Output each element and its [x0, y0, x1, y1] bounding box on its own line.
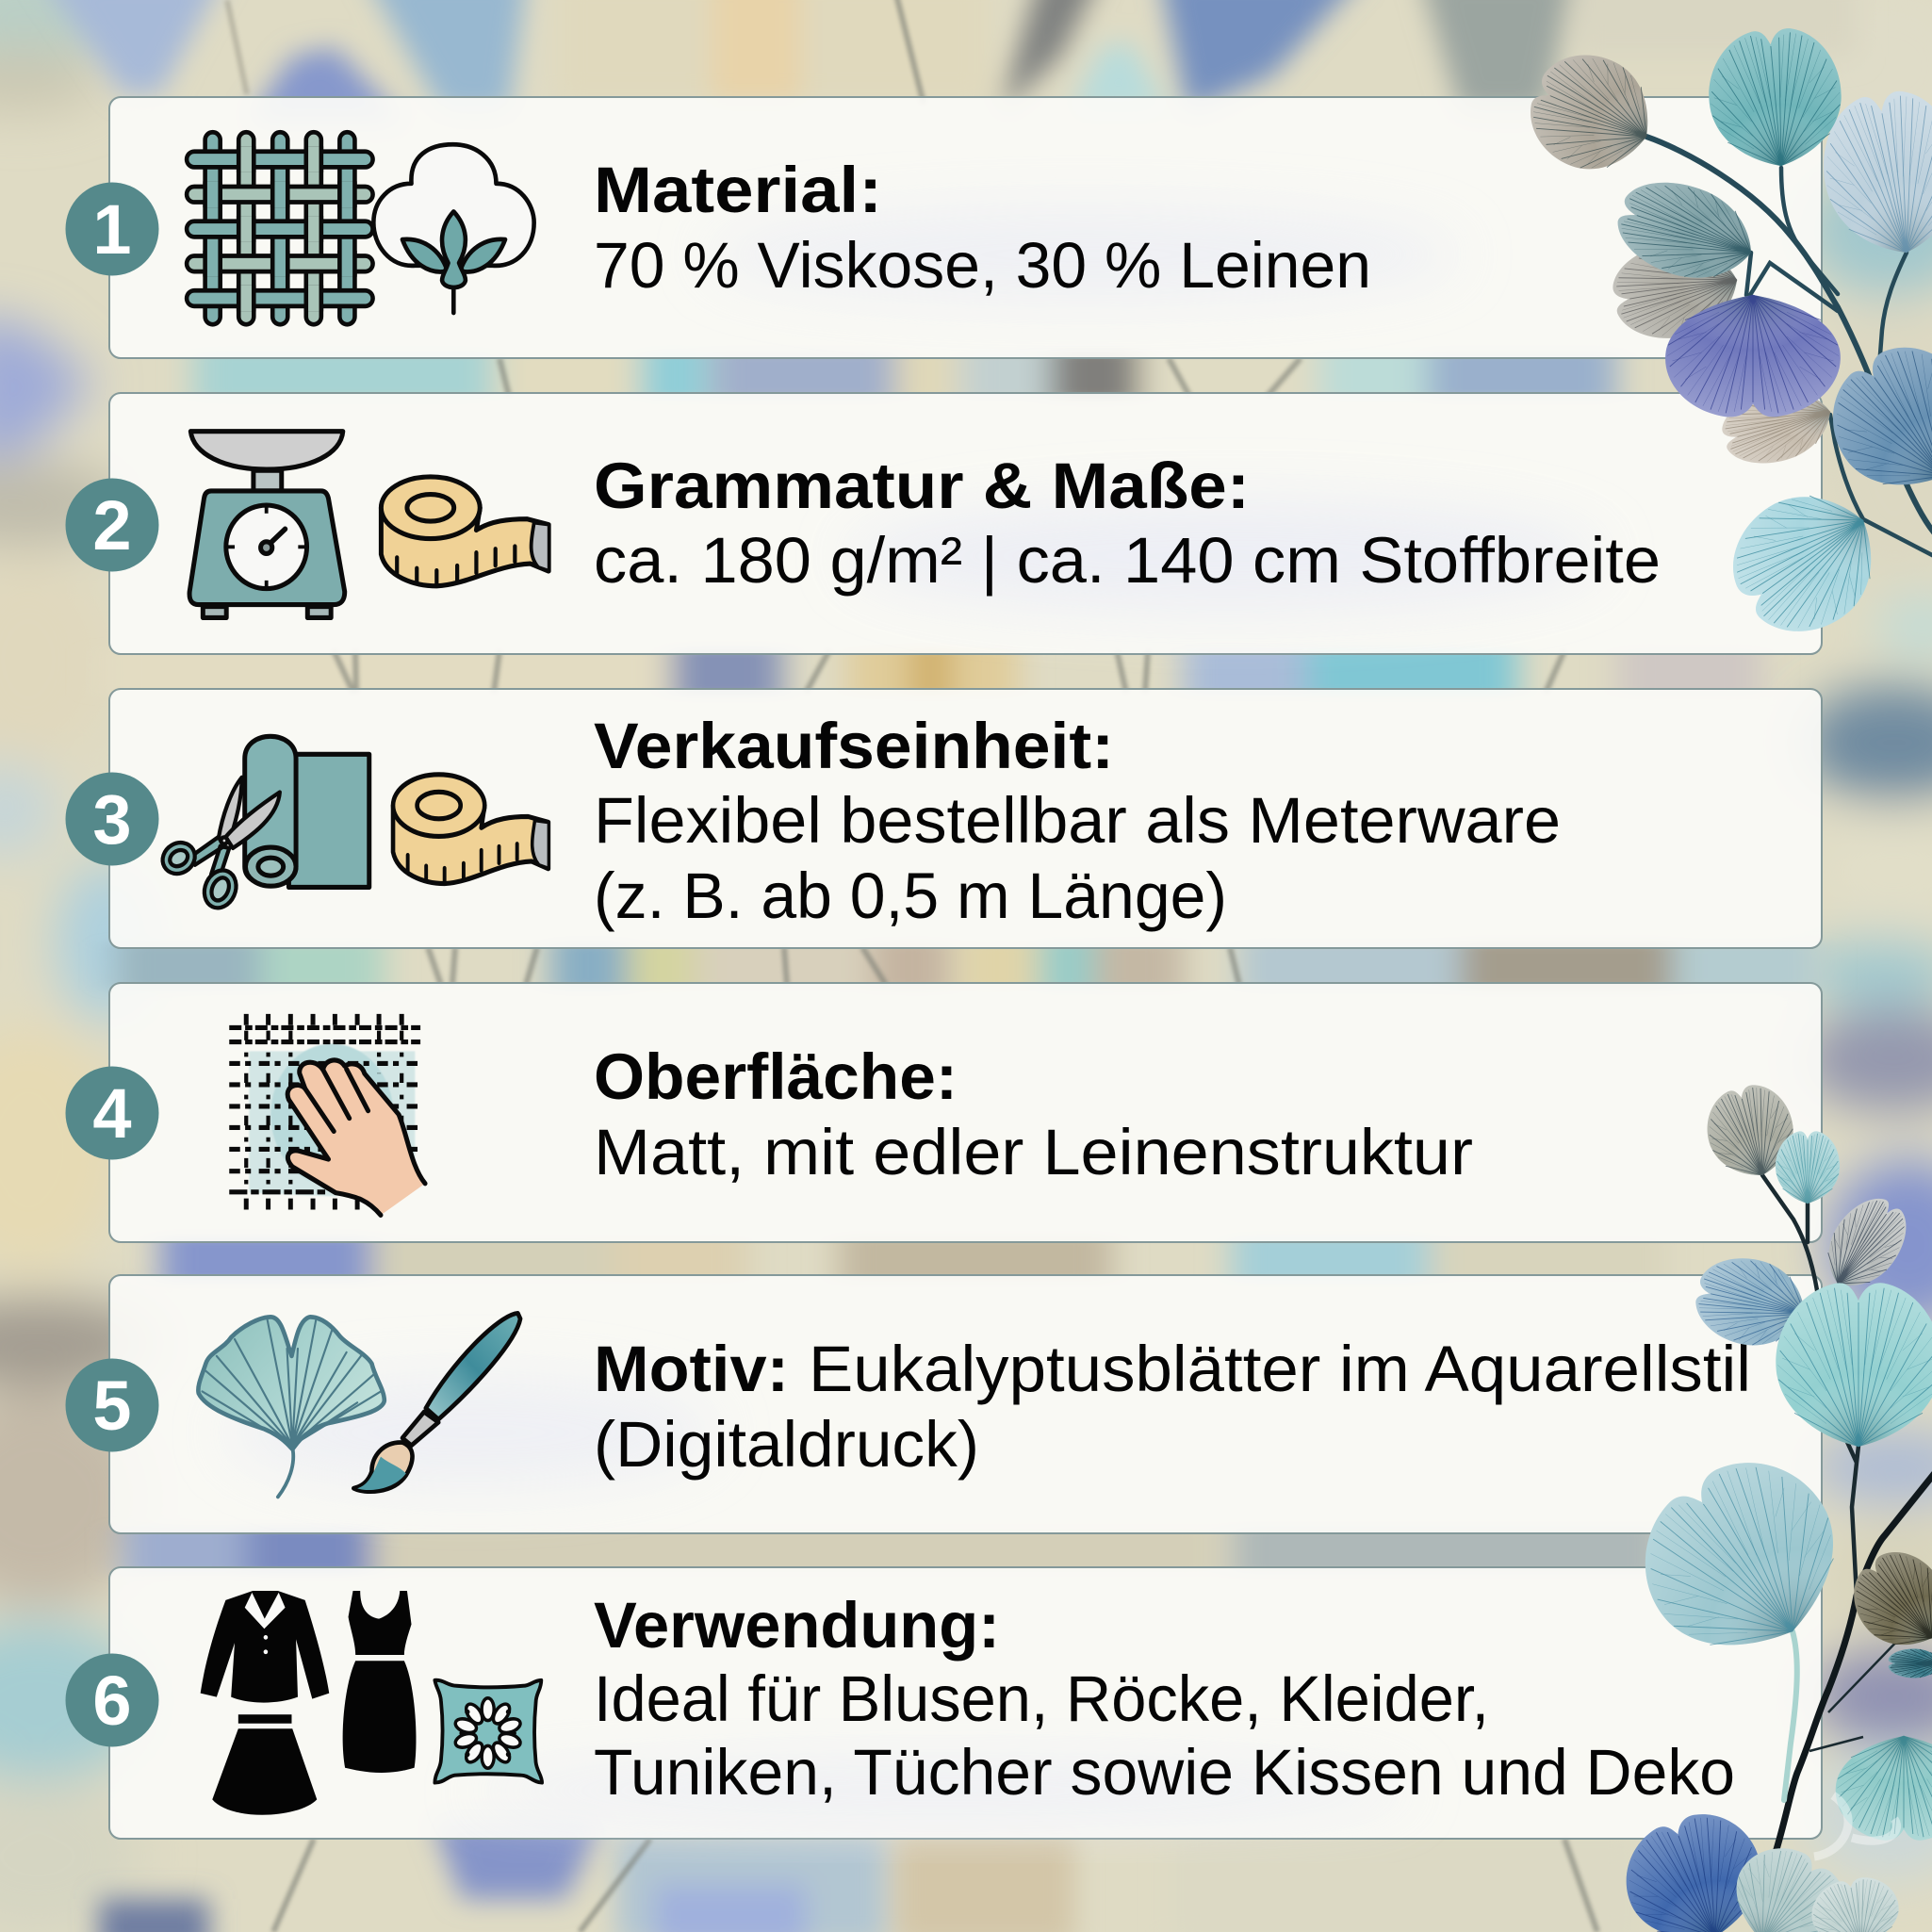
- icon: skirt: [212, 1714, 317, 1815]
- number badge 2: [66, 479, 158, 571]
- bottom margin: [99, 1899, 209, 1932]
- card: [109, 689, 1822, 948]
- heading: Verwendung:: [594, 1589, 1000, 1662]
- icon: hand on linen texture: [229, 1014, 425, 1215]
- icon: scissors: [157, 778, 280, 913]
- heading: Verkaufseinheit:: [594, 710, 1114, 782]
- description line 2: (Digitaldruck): [594, 1408, 979, 1481]
- top eucalyptus branch: [1515, 25, 1932, 657]
- number badge 1: [66, 183, 158, 275]
- watermark: [1814, 1795, 1897, 1857]
- number badge 2: 2: [92, 486, 132, 565]
- icon: decorative pillow: [434, 1680, 542, 1783]
- panel 3: sales unit: [66, 689, 1822, 948]
- panel 6: use: [66, 1567, 1822, 1839]
- icon: paint brush: [353, 1313, 520, 1492]
- description line 1: Eukalyptusblätter im Aquarellstil: [809, 1333, 1751, 1405]
- number badge 6: 6: [92, 1662, 132, 1740]
- gap 5: [123, 1527, 245, 1574]
- heading: Grammatur & Maße:: [594, 450, 1250, 522]
- icon: dress: [343, 1591, 416, 1773]
- icon: ginkgo leaf: [198, 1317, 385, 1497]
- description line 2: Tuniken, Tücher sowie Kissen und Deko: [594, 1736, 1735, 1809]
- heading: Motiv:: [594, 1333, 789, 1405]
- number badge 4: [66, 1067, 158, 1159]
- description: 70 % Viskose, 30 % Leinen: [594, 229, 1371, 302]
- icon: blouse: [201, 1591, 329, 1703]
- number badge 6: [66, 1653, 158, 1747]
- number badge 5: [66, 1359, 158, 1451]
- gap 4: [160, 1236, 372, 1282]
- panel 1: material: [66, 97, 1822, 358]
- panel 4: surface: [66, 983, 1822, 1242]
- right margin: [1791, 0, 1932, 151]
- icon: measuring tape: [381, 477, 549, 586]
- card: [109, 983, 1822, 1242]
- top margin: [38, 0, 226, 94]
- gap 3: [117, 942, 261, 990]
- card: [109, 97, 1822, 358]
- icon: fabric roll: [245, 736, 369, 887]
- description: ca. 180 g/m² | ca. 140 cm Stoffbreite: [594, 524, 1661, 597]
- number badge 1: 1: [92, 190, 132, 269]
- bottom eucalyptus branch: [1610, 1077, 1932, 1932]
- icon: measuring tape: [393, 775, 548, 884]
- description line 1: Flexibel bestellbar als Meterware: [594, 784, 1561, 857]
- panel 2: weight and dimensions: [66, 393, 1822, 654]
- number badge 5: 5: [92, 1367, 132, 1445]
- gap 1: [194, 352, 495, 399]
- number badge 4: 4: [92, 1074, 132, 1153]
- panel 5: motif: [66, 1275, 1822, 1533]
- gap 2: [104, 648, 669, 696]
- description line 2: (z. B. ab 0,5 m Länge): [594, 860, 1227, 932]
- icon: cotton flower: [373, 144, 534, 313]
- icon: woven fabric: [194, 140, 366, 317]
- card: [109, 1275, 1822, 1533]
- description: Matt, mit edler Leinenstruktur: [594, 1116, 1473, 1188]
- card: [109, 1567, 1822, 1839]
- number badge 3: 3: [92, 780, 132, 859]
- number badge 3: [66, 773, 158, 865]
- heading: Material:: [594, 154, 882, 226]
- description line 1: Ideal für Blusen, Röcke, Kleider,: [594, 1662, 1489, 1735]
- heading: Oberfläche:: [594, 1040, 958, 1113]
- icon: kitchen scale: [189, 432, 345, 617]
- left margin: [0, 0, 123, 61]
- card: [109, 393, 1822, 654]
